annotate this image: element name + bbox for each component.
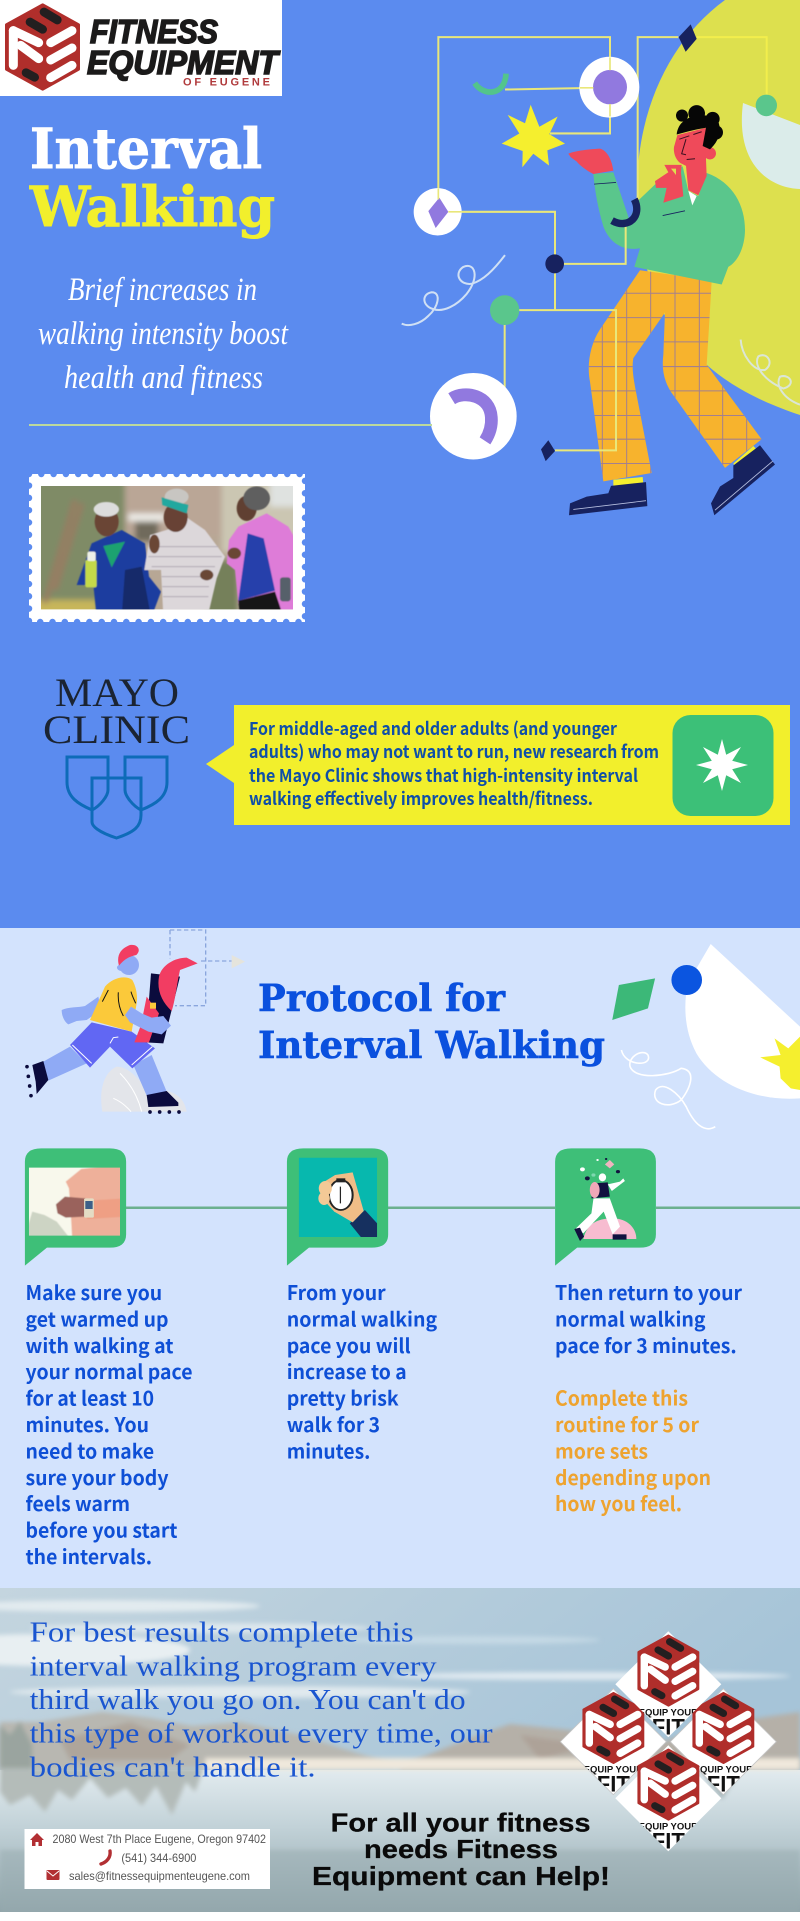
node: purple disc	[579, 57, 639, 118]
heading: protocol: Protocol for	[258, 976, 506, 1020]
logo wordmark	[87, 13, 281, 88]
step 1 text: need to make	[26, 1435, 154, 1464]
Mayo wordmark: CLINIC	[43, 707, 190, 752]
stamp photo: three women walking	[25, 470, 312, 627]
white squiggle	[621, 1050, 715, 1129]
phone number: (541) 344-6900	[121, 1851, 197, 1865]
subtitle: walking intensity boost	[38, 316, 289, 352]
step 3 note: Complete this	[555, 1383, 688, 1412]
tile right: FIT	[707, 1772, 740, 1797]
illustration: protocol walker	[25, 930, 245, 1114]
logo wordmark: EQUIPMENT	[87, 44, 281, 81]
step 1 text: with walking at	[26, 1330, 174, 1359]
Mayo shields	[67, 757, 167, 838]
closing advice text: For best results complete this	[30, 1618, 414, 1649]
pale rock	[101, 1067, 187, 1112]
man: pointing hand	[568, 149, 613, 174]
rear arm	[62, 997, 101, 1024]
tile top	[615, 1631, 721, 1739]
navy diamond top	[679, 24, 697, 52]
Equip Your Fit logo tiles	[560, 1631, 776, 1853]
step 1 text: your normal pace	[26, 1356, 192, 1385]
illustration: protocol decoration	[612, 944, 800, 1129]
photo: stopwatch in hand	[299, 1158, 377, 1237]
callout icon: star tile	[672, 715, 774, 816]
shorts trim	[72, 1037, 152, 1065]
man: shoes	[569, 445, 775, 515]
pale arrow head	[232, 955, 245, 968]
yellow star part	[760, 1037, 800, 1090]
step 3 text: pace for 3 minutes.	[555, 1330, 737, 1359]
man: socks	[613, 446, 757, 486]
Mayo wordmark	[43, 670, 190, 752]
subtitle: Brief increases in	[68, 272, 257, 308]
step 3 note: more sets	[555, 1435, 648, 1464]
closing advice text: interval walking program every	[30, 1652, 437, 1683]
step 3 note: routine for 5 or	[555, 1409, 699, 1438]
navy diamond bottom	[541, 440, 555, 461]
step 1 text: sure your body	[26, 1462, 169, 1491]
step 1 text: minutes. You	[26, 1409, 149, 1438]
illustration: thinking man with circuit diagram	[402, 24, 800, 515]
node: green circle	[490, 295, 519, 325]
bubble 3	[555, 1148, 656, 1266]
footer landscape background	[0, 1588, 800, 1920]
dashed frame and arrow	[170, 930, 232, 1006]
step 2 text: pretty brisk	[287, 1383, 399, 1412]
closing advice text: third walk you go on. You can't do	[30, 1685, 466, 1716]
photo: smartwatch on wrist	[29, 1168, 120, 1236]
man: neck and face	[674, 128, 716, 195]
logo wordmark: OF EUGENE	[183, 76, 270, 88]
callout: research summary	[206, 705, 790, 825]
step 1 text	[26, 1277, 192, 1570]
contact panel	[24, 1829, 270, 1889]
man: collar	[688, 191, 697, 205]
tile bottom	[615, 1745, 721, 1853]
step 2 text: normal walking	[287, 1303, 437, 1332]
step 2 text: From your	[287, 1277, 386, 1306]
step 2 text: minutes.	[287, 1435, 370, 1464]
front leg	[133, 1055, 167, 1096]
call to action	[312, 1808, 610, 1891]
tile left: EQUIP YOUR	[584, 1765, 643, 1776]
step 2 text: increase to a	[287, 1356, 407, 1385]
callout text: For middle-aged and older adults (and younger	[249, 716, 617, 741]
shirt	[90, 977, 137, 1032]
logo wordmark: FITNESS	[90, 13, 218, 50]
node: large white circle with arc	[430, 373, 517, 459]
tag	[150, 1003, 156, 1009]
green kite	[612, 978, 655, 1020]
head	[117, 945, 139, 975]
step 1 text: for at least 10	[26, 1383, 154, 1412]
logo panel	[0, 0, 282, 96]
step icons	[24, 1148, 656, 1266]
rock strokes	[113, 1073, 142, 1112]
node: purple diamond	[414, 188, 462, 235]
title	[29, 116, 275, 239]
blue dot	[671, 965, 702, 995]
callout text: adults) who may not want to run, new research from	[249, 739, 659, 764]
closing advice text	[30, 1618, 493, 1784]
heading: protocol: Interval Walking	[258, 1023, 605, 1067]
step 2 text: pace you will	[287, 1330, 411, 1359]
step 1 text: the intervals.	[26, 1541, 152, 1570]
circuit lines	[438, 37, 767, 450]
title: Interval	[30, 116, 262, 181]
front skate	[147, 1091, 178, 1107]
call to action: Equipment can Help!	[312, 1861, 610, 1891]
callout body	[206, 705, 790, 825]
man: hand at chin	[655, 165, 683, 203]
man: trousers	[587, 270, 767, 486]
squiggle left	[402, 255, 505, 325]
step 3 text: Then return to your	[555, 1277, 742, 1306]
tile right: EQUIP YOUR	[694, 1765, 753, 1776]
node: navy circle	[545, 254, 564, 273]
logo icon	[6, 5, 79, 89]
call to action: needs Fitness	[364, 1834, 558, 1864]
step 3 note: depending upon	[555, 1462, 711, 1491]
shorts	[70, 1022, 155, 1068]
tile bottom: FIT	[652, 1828, 685, 1853]
man: green sweater	[593, 166, 745, 284]
rear skate	[32, 1061, 48, 1094]
tile top: FIT	[652, 1714, 685, 1739]
bubble 1	[24, 1148, 126, 1266]
illustration: pale half disc	[742, 103, 800, 189]
closing advice text: bodies can't handle it.	[30, 1753, 316, 1784]
green arc	[475, 74, 506, 92]
page background: blue band	[0, 0, 800, 928]
icon: envelope	[46, 1870, 60, 1880]
Mayo Clinic logo	[43, 670, 190, 838]
timeline connectors	[126, 1206, 800, 1209]
yellow star	[502, 105, 565, 167]
illustration: hiker with pink mound	[574, 1158, 636, 1241]
tile left	[560, 1689, 666, 1797]
step 3 note: how you feel.	[555, 1488, 682, 1517]
tile right	[670, 1689, 776, 1797]
illustration: yellow backdrop shape	[637, 0, 800, 415]
white swoosh	[685, 944, 800, 1099]
protocol section background	[0, 928, 800, 1588]
step 3 text: normal walking	[555, 1303, 706, 1332]
closing advice text: this type of workout every time, our	[30, 1719, 493, 1750]
notch in hand	[671, 169, 676, 175]
callout text	[249, 716, 659, 811]
icon: phone	[101, 1851, 110, 1864]
tile left: FIT	[597, 1772, 630, 1797]
skate wheels	[25, 1065, 181, 1114]
step 3 text	[555, 1277, 742, 1359]
icon: house	[30, 1833, 44, 1846]
address: 2080 West 7th Place Eugene, Oregon 97402	[52, 1832, 266, 1846]
navy arc	[612, 199, 637, 224]
step 1 text: Make sure you	[26, 1277, 162, 1306]
step 2 text: walk for 3	[287, 1409, 380, 1438]
tile bottom: EQUIP YOUR	[639, 1821, 698, 1832]
squiggle right	[741, 340, 800, 405]
step 2 text	[287, 1277, 437, 1464]
red shape	[134, 958, 198, 1042]
subtitle	[38, 272, 289, 396]
tile top: EQUIP YOUR	[639, 1707, 698, 1718]
title: Walking	[29, 174, 275, 239]
man: garment creases	[594, 182, 685, 216]
board	[146, 973, 180, 1043]
node: green top-right circle	[756, 95, 777, 116]
shirt lines	[102, 990, 136, 1016]
man: hair	[676, 105, 723, 149]
front arm	[125, 1007, 171, 1034]
heading: protocol	[258, 976, 605, 1067]
step 3 note	[555, 1383, 711, 1517]
rear leg	[43, 1047, 87, 1081]
subtitle: health and fitness	[64, 360, 263, 396]
bubble 2	[287, 1148, 388, 1266]
subtitle rule	[29, 424, 432, 426]
step 1 text: feels warm	[26, 1488, 130, 1517]
call to action: For all your fitness	[331, 1808, 591, 1838]
callout text: the Mayo Clinic shows that high-intensity interval	[249, 763, 638, 788]
Mayo wordmark: MAYO	[55, 670, 179, 715]
email: sales@fitnessequipmenteugene.com	[69, 1869, 250, 1883]
step 1 text: get warmed up	[26, 1303, 168, 1332]
step 1 text: before you start	[26, 1515, 178, 1544]
callout text: walking effectively improves health/fitness.	[249, 786, 593, 811]
